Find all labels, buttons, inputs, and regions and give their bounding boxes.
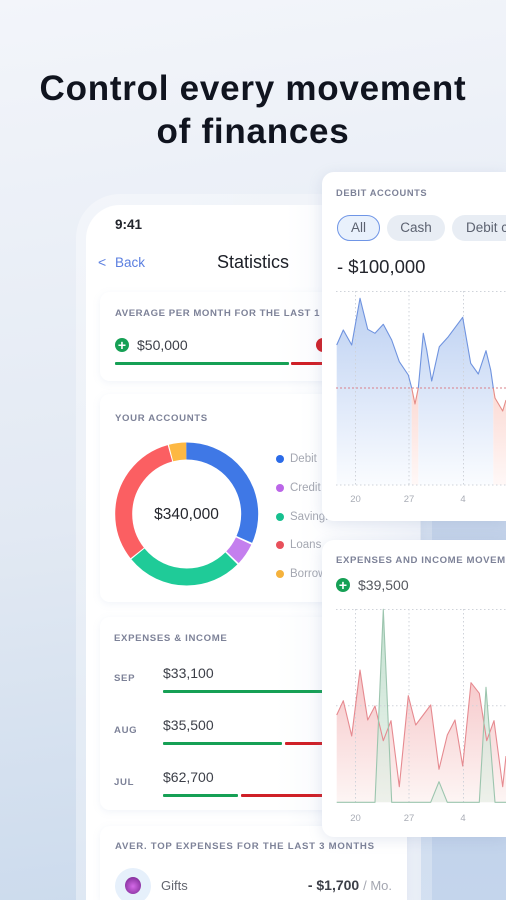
line chart: debit accounts: [336, 291, 506, 505]
income line: [337, 609, 506, 802]
donut chart: $340,000: [154, 506, 219, 523]
phone screen: [86, 205, 421, 900]
expense line: [337, 670, 506, 787]
phone frame: [76, 194, 432, 900]
line chart: debit accounts: 27: [404, 494, 414, 505]
line chart: expenses and income: 4: [460, 813, 466, 824]
legend: debit: [276, 453, 317, 465]
balance: - $100,000: [337, 256, 425, 277]
amount: $39,500: [358, 577, 409, 593]
gem: [125, 877, 141, 894]
plus icon: [115, 338, 129, 352]
plus icon: [336, 578, 350, 592]
expense bar: [291, 362, 331, 365]
label: YOUR ACCOUNTS: [115, 413, 208, 424]
filter cash: [387, 215, 445, 241]
back chevron: <: [98, 254, 106, 270]
plus icon: +: [339, 577, 347, 593]
filter cash: Cash: [400, 220, 432, 235]
line chart: debit accounts: 20: [350, 494, 361, 505]
minus icon: [316, 338, 330, 352]
filter all: [337, 215, 380, 241]
panel: expenses and income: [100, 617, 420, 810]
right background tint: [420, 300, 506, 900]
amount jul: $62,700: [163, 769, 214, 785]
label: EXPENSES AND INCOME MOVEM: [336, 555, 506, 566]
title: of finances: [156, 112, 350, 151]
gifts amount: - $1,700 / Mo.: [308, 877, 392, 893]
status time: 9:41: [115, 217, 142, 232]
panel: your accounts: [100, 394, 420, 602]
bar aug income: [163, 742, 282, 745]
panel: expenses and income movement: [322, 540, 506, 837]
legend: savings: Saving.: [290, 511, 328, 523]
line chart: expenses and income: 20: [350, 813, 361, 824]
month jul: JUL: [114, 777, 134, 788]
legend: loans: Loans: [290, 539, 321, 551]
title: [40, 69, 466, 151]
legend: credit: [276, 482, 321, 494]
back link: Back: [115, 255, 145, 270]
label: DEBIT ACCOUNTS: [336, 188, 427, 198]
bar sep: [163, 690, 328, 693]
panel: average per month: [100, 292, 420, 381]
donut chart: [115, 442, 258, 586]
area: [337, 298, 412, 485]
screen title: Statistics: [217, 252, 289, 272]
bar jul expense: [241, 794, 331, 797]
filter all: All: [351, 220, 366, 235]
legend: credit: Credit: [290, 482, 321, 494]
month aug: AUG: [114, 725, 137, 736]
filter debit: [452, 215, 506, 241]
income bar: [115, 362, 289, 365]
income amount: $50,000: [137, 337, 188, 353]
label: AVER. TOP EXPENSES FOR THE LAST 3 MONTHS: [115, 841, 375, 852]
line chart: expenses and income: [336, 608, 506, 824]
plus icon: +: [118, 337, 126, 353]
legend: [276, 453, 328, 580]
month sep: SEP: [114, 673, 135, 684]
panel: debit accounts chart: [322, 172, 506, 521]
bar jul income: [163, 794, 238, 797]
title: Control every movement: [40, 69, 466, 108]
amount sep: $33,100: [163, 665, 214, 681]
label: AVERAGE PER MONTH FOR THE LAST 1: [115, 308, 320, 319]
amount aug: $35,500: [163, 717, 214, 733]
expense area: [337, 670, 506, 802]
legend: debit: Debit: [290, 453, 317, 465]
legend: borrowed: Borrow: [290, 568, 326, 580]
panel: top expenses: [100, 826, 407, 900]
legend: loans: [276, 539, 321, 551]
gifts name: Gifts: [161, 878, 188, 893]
bar aug expense: [285, 742, 330, 745]
line chart: debit accounts: 4: [460, 494, 466, 505]
income area: [375, 609, 495, 802]
label: EXPENSES & INCOME: [114, 633, 227, 644]
line chart: expenses and income: 27: [404, 813, 414, 824]
gifts icon: [115, 868, 151, 900]
